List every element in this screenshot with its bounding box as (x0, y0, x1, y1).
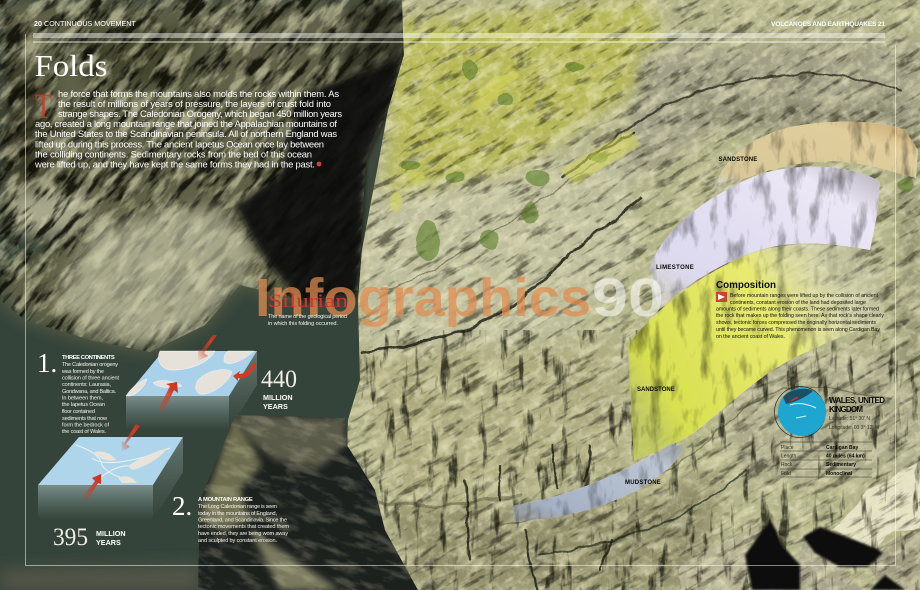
step 1 text: floor contained (62, 409, 95, 415)
location title: Longitude: 00 3° 12' W (829, 425, 880, 431)
label: 395 million years: 395 (53, 524, 88, 551)
composition panel: until they became curved. This phenomenon is seen along Cardigan Bay (716, 327, 880, 333)
step 1 text: continents: Laurasia, (62, 382, 111, 388)
data table (780, 442, 872, 477)
icon: globe locator (774, 386, 826, 438)
watermark: 90 (592, 268, 664, 328)
composition panel: Before mountain ranges were lifted up by the collision of ancient (730, 293, 879, 299)
step 2 text: have ended, they are being worn away (198, 531, 288, 537)
step 1 text: form the bedrock of (62, 422, 109, 428)
step 2 text: tectonic movements that created them (198, 524, 289, 530)
band label: mudstone: MUDSTONE (625, 480, 661, 486)
label: 395 million years: YEARS (96, 538, 121, 547)
diagram: 395 million years block (38, 424, 183, 520)
rock band: lower sandstone (628, 245, 885, 460)
label: 440 million years: 440 (261, 366, 297, 393)
data table: Sedimentary (826, 462, 856, 468)
header: left folio: 20 CONTINUOUS MOVEMENT (34, 19, 136, 28)
arrow (198, 335, 217, 361)
period label: Silurian: The name of the geological period (268, 314, 347, 320)
band label: sandstone upper: SANDSTONE (718, 157, 758, 163)
composition panel: continents, constant erosion of the land had deposited large (730, 300, 866, 306)
composition panel: shows, tectonic forces compressed the originally horizontal sediments (716, 320, 876, 326)
header rules (33, 33, 885, 43)
band label: sandstone lower: SANDSTONE (637, 387, 675, 393)
step 1 text (61, 355, 119, 435)
step 1 text: the Iapetus Ocean (62, 402, 105, 408)
intro text block: strange shapes. The Caledonian Orogeny, which began 450 million years (58, 108, 342, 119)
composition panel: Composition (716, 280, 776, 291)
intro text block: ago, created a long mountain range that joined the Appalachian mountains of (35, 118, 337, 129)
step 2 text: today in the mountains of England, (198, 511, 277, 517)
intro text block: were lifted up, and they have kept the same forms they had in the past. (34, 158, 315, 170)
band label: limestone: LIMESTONE (656, 265, 694, 271)
location title: KINGDOM (829, 405, 863, 414)
location title: WALES, UNITED (829, 396, 885, 405)
label: 440 million years: YEARS (263, 402, 288, 411)
data table: Cardigan Bay (826, 445, 858, 451)
intro text block: the result of millions of years of pressure, the layers of crust fold into (58, 98, 331, 109)
label: 440 million years: MILLION (263, 393, 293, 402)
label: 395 million years (53, 524, 126, 551)
composition panel: on the ancient coast of Wales. (716, 334, 785, 340)
period label: Silurian: Silurian (268, 291, 349, 312)
drop cap: T (35, 86, 52, 126)
watermark: Infographics (255, 268, 591, 328)
intro text block: he force that forms the mountains also molds the rocks within them. As (58, 88, 339, 99)
arrow (121, 424, 140, 452)
step 2 number: 2. (172, 491, 192, 521)
shadowed foreground rock (198, 415, 418, 590)
composition panel (716, 280, 884, 340)
intro text block: lifted up during this process. The ancient Iapetus Ocean once lay between (35, 138, 324, 150)
data table: Length (781, 454, 797, 460)
period label: Silurian: in which this folding occurred. (268, 321, 338, 327)
title: Folds (34, 48, 108, 83)
data table: Rock (781, 462, 793, 468)
step 1 text: the coast of Wales. (62, 429, 106, 435)
icon: red arrow box (716, 292, 727, 302)
step 2 text: and sculpted by constant erosion. (198, 538, 277, 544)
step 2 text: Greenland, and Scandinavia. Since the (198, 518, 287, 524)
data table: 40 miles (64 km) (826, 454, 865, 460)
data table: Place (781, 445, 794, 451)
step 2 text (198, 497, 289, 544)
data table: Fold (781, 471, 791, 477)
location title: Latitude: 51° 30' N (829, 416, 870, 422)
step 2 text: The Long Caledonian range is seen (198, 504, 277, 510)
step 1 number: 1. (37, 348, 57, 378)
period label: Silurian (268, 291, 349, 327)
step 2 text: A MOUNTAIN RANGE (198, 497, 253, 503)
step 1 text: THREE CONTINENTS (62, 355, 115, 361)
step 1 text: sediments that now (62, 416, 108, 422)
step 1 text: Gondwana, and Baltica. (62, 389, 116, 395)
data table: Monoclinal (826, 471, 853, 477)
foreground boulders lower right (680, 460, 920, 590)
label: 440 million years (261, 366, 297, 411)
step 1 text: The Caledonian orogeny (62, 362, 118, 368)
diagram: 440 million years block (126, 335, 257, 430)
label: 395 million years: MILLION (96, 529, 126, 538)
intro text block: the colliding continents. Sedimentary rocks from the bed of this ocean (35, 148, 312, 160)
step 1 text: collision of three ancient (62, 376, 119, 382)
header: right folio: VOLCANOES AND EARTHQUAKES 21 (771, 21, 885, 28)
rock band: limestone (650, 167, 880, 308)
location title (829, 396, 885, 431)
step 1 text: was formed by the (61, 369, 104, 375)
rock band: mudstone (512, 443, 684, 522)
arrow (82, 474, 101, 501)
arrow (157, 382, 178, 414)
step 1 text: In between them, (62, 396, 103, 402)
composition panel: amounts of sediments along their coasts. These sediments later formed (716, 306, 879, 312)
rock band: upper sandstone (712, 122, 918, 192)
arrow (233, 363, 256, 381)
composition panel: the rock that makes up the folding seen here. As that rock's shape clearly (716, 313, 884, 319)
intro text block: the United States to the Scandinavian peninsula. All of northern England was (35, 128, 337, 139)
intro text block (34, 86, 342, 170)
